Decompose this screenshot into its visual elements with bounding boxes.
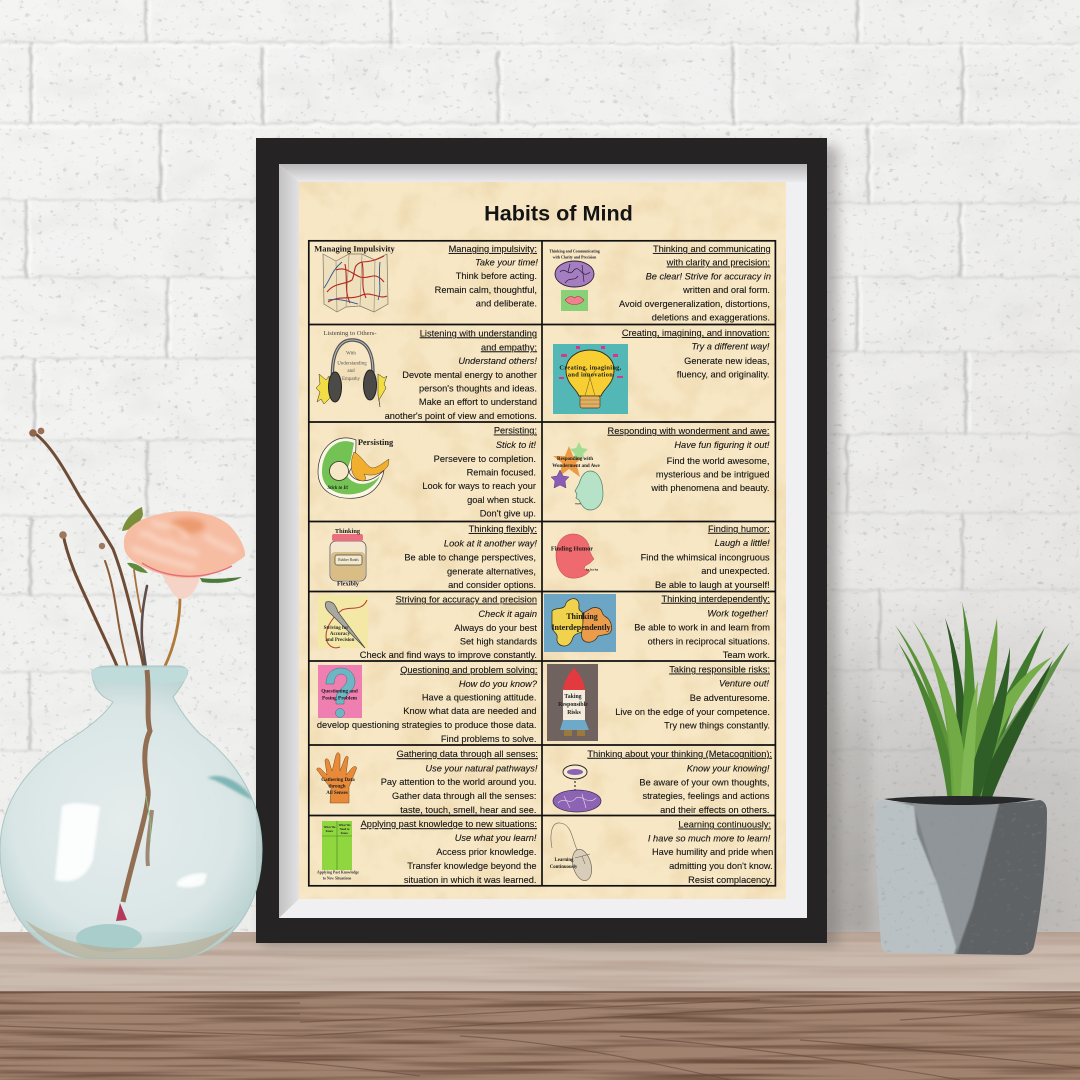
icon: puzzle pieces: Interdependently (551, 623, 611, 632)
icon: road map (314, 244, 396, 312)
icon: green chart: Know (326, 829, 334, 833)
text: accuracy and precision: Set high standards (460, 636, 537, 646)
rose (122, 507, 245, 599)
icon: jar (330, 528, 366, 588)
panel: learning continuously (550, 820, 773, 885)
icon: headphones: Listening to Others- (323, 330, 377, 337)
icon: green chart: Need to (340, 827, 350, 831)
icon: rocket: Risks (567, 710, 582, 716)
picture frame (256, 138, 827, 943)
text: questioning (317, 665, 538, 744)
text: thinking interdependently: Be able to work in and learn from (634, 622, 770, 632)
text: wonderment and awe: Have fun figuring it out! (674, 440, 770, 450)
picture frame shadow (262, 146, 838, 946)
branches (29, 428, 180, 668)
icon: question mark: Questioning and (321, 688, 358, 694)
icon: stars and head: Responding with (557, 457, 593, 462)
panel: taking responsible risks (547, 664, 770, 741)
icon: laughing head: ha ha ha (586, 568, 599, 572)
icon: stars and head: Wonderment and Awe (552, 464, 600, 469)
text: learning continuously: Learning continuously: (678, 820, 771, 830)
icon: rocket: Responsible (558, 702, 588, 708)
panel: creating and innovation (553, 328, 770, 414)
text: creating and innovation: Generate new ideas, (684, 356, 770, 366)
panel: persisting (318, 426, 537, 518)
wooden shelf (0, 932, 1080, 1080)
icon: tape dispenser: Stick to It! (327, 486, 349, 491)
text: persisting (422, 426, 537, 518)
text: applying past knowledge: Use what you learn! (455, 833, 537, 843)
icon: road map: Managing Impulsivity (314, 244, 396, 254)
text: thinking flexibly: Be able to change perspectives, (404, 553, 536, 563)
text: creating and innovation: Creating, imagining, and innovation: (622, 328, 770, 338)
text: listening (385, 328, 537, 421)
text: thinking flexibly: and consider options. (448, 580, 536, 590)
icon: light bulb: and innovation (568, 372, 613, 378)
text: applying past knowledge: Access prior knowledge. (436, 847, 536, 857)
text: managing impulsivity: Managing impulsivity: (449, 244, 537, 254)
icon: needle and thread: Striving for (324, 626, 349, 631)
icon: brain and lips: with Clarity and Precision (553, 256, 597, 260)
panel: wonderment and awe (551, 426, 770, 510)
text: metacognition: Be aware of your own thoughts, (639, 778, 770, 788)
text: thinking interdependently: Work together! (707, 608, 768, 618)
text: wonderment and awe: with phenomena and beauty. (650, 483, 770, 493)
panel: finding humor (551, 524, 770, 590)
text: taking responsible risks: Taking responsible risks: (669, 664, 770, 674)
vase body (0, 666, 262, 960)
text: persisting: Don't give up. (480, 508, 536, 518)
icon: stars and head (551, 442, 603, 510)
text: thinking interdependently (634, 594, 770, 660)
text: questioning: How do you know? (459, 679, 538, 689)
icon: light bulb (553, 344, 628, 414)
panel: metacognition (553, 749, 772, 815)
text: persisting: Stick to it! (496, 440, 536, 450)
concrete pot (876, 796, 1047, 955)
text: learning continuously: Have humility and pride when (652, 847, 773, 857)
icon: tape dispenser: Persisting (358, 438, 394, 447)
text: persisting: Persevere to completion. (434, 454, 536, 464)
text: accuracy and precision (360, 594, 537, 660)
icon: puzzle pieces: Thinking (566, 612, 598, 621)
vase with branches and rose (0, 428, 262, 960)
icon: headphones: and (347, 369, 355, 374)
text: applying past knowledge: Applying past knowledge to new situations: (361, 819, 537, 829)
panel: thinking interdependently (544, 594, 770, 660)
text: wonderment and awe: mysterious and be intrigued (656, 470, 770, 480)
icon: green chart: Know (341, 831, 349, 835)
text: gathering data: taste, touch, smell, hear and see. (400, 805, 536, 815)
text: listening: another's point of view and emotions. (385, 411, 537, 421)
text: thinking and communicating: deletions and exaggerations. (652, 312, 770, 322)
icon: computer mouse: Continuously (550, 865, 578, 870)
text: finding humor: Find the whimsical incongruous (641, 552, 770, 562)
text: metacognition: strategies, feelings and actions (642, 791, 770, 801)
icon: thought bubble and brain (553, 765, 601, 812)
parchment poster (299, 182, 786, 899)
icon: needle and thread: Accuracy (330, 632, 351, 637)
text: metacognition: Know your knowing! (687, 764, 770, 774)
text: taking responsible risks: Venture out! (719, 678, 769, 688)
text: learning continuously: admitting you don't know. (669, 861, 773, 871)
icon: hand (317, 753, 357, 803)
panel: questioning (317, 665, 538, 744)
text: gathering data: Pay attention to the world around you. (381, 777, 536, 787)
icon: laughing head: Finding Humor (551, 546, 593, 552)
text: finding humor: Finding humor: (708, 524, 770, 534)
text: managing impulsivity: Think before acting. (456, 271, 537, 281)
text: listening: and empathy: (481, 342, 537, 352)
text: gathering data: Use your natural pathways! (425, 764, 538, 774)
text: thinking flexibly (404, 524, 537, 590)
text: gathering data: Gathering data through all senses: (397, 749, 538, 759)
text: persisting: Look for ways to reach your (422, 481, 536, 491)
icon: laughing head (551, 534, 599, 578)
text: taking responsible risks: Live on the edge of your competence. (615, 707, 770, 717)
text: questioning: Find problems to solve. (441, 734, 536, 744)
text: gathering data (381, 749, 538, 815)
text: metacognition: and their effects on others. (660, 805, 770, 815)
potted plant (870, 602, 1070, 960)
text: thinking interdependently: others in reciprocal situations. (648, 636, 770, 646)
icon: rocket (547, 664, 598, 741)
icon: needle and thread: and Precision (326, 638, 355, 643)
text: finding humor: and unexpected. (701, 566, 770, 576)
icon: light bulb: Creating, imagining, (559, 364, 622, 372)
text: metacognition: Thinking about your thinking (Metacognition): (587, 749, 772, 759)
text: thinking interdependently: Thinking interdependently: (661, 594, 770, 604)
icon: hand: through (328, 784, 346, 790)
text: thinking flexibly: Look at it another way! (444, 539, 537, 549)
icon: green chart: to New Situations (323, 876, 352, 880)
icon: computer mouse: Learning (555, 858, 574, 863)
text: learning continuously: I have so much more to learn! (648, 834, 771, 844)
text: accuracy and precision: Check it again (478, 609, 537, 619)
icon: brain and lips (549, 250, 600, 311)
text: creating and innovation: fluency, and originality. (677, 370, 770, 380)
icon: headphones: Empathy (342, 377, 361, 382)
icon: hand: All Senses (326, 791, 348, 796)
text: thinking and communicating: Avoid overgeneralization, distortions, (619, 299, 770, 309)
icon: green chart (317, 821, 359, 880)
icon: brain and lips: Thinking and Communicating (549, 250, 600, 254)
text: listening: person's thoughts and ideas. (419, 384, 537, 394)
panel: applying past knowledge (317, 819, 537, 885)
icon: puzzle pieces (544, 594, 616, 652)
panel: gathering data (317, 749, 538, 815)
icon: headphones: Understanding (337, 362, 367, 366)
icon: rocket: Taking (564, 694, 582, 700)
text: thinking flexibly: generate alternatives, (447, 566, 536, 576)
text: thinking and communicating: written and oral form. (682, 285, 770, 295)
text: taking responsible risks: Try new things constantly. (664, 720, 770, 730)
icon: hand: Gathering Data (321, 778, 355, 783)
icon: needle and thread (318, 595, 368, 648)
text: learning continuously: Resist complacency. (688, 875, 772, 885)
icon: tape dispenser (318, 438, 394, 498)
icon: jar: Rubber Bands (338, 558, 359, 562)
text: applying past knowledge: situation in which it was learned. (404, 875, 536, 885)
text: thinking interdependently: Team work. (723, 650, 770, 660)
panel: thinking and communicating (549, 244, 771, 322)
white mat (279, 164, 807, 918)
panel: accuracy and precision (318, 594, 537, 660)
text: questioning: Know what data are needed and (403, 706, 536, 716)
text: taking responsible risks (615, 664, 770, 730)
text: thinking and communicating: with clarity and precision: (666, 258, 770, 268)
text: wonderment and awe (608, 426, 770, 493)
icon: question mark (318, 665, 362, 718)
table grid (308, 240, 776, 886)
text: listening: Devote mental energy to another (402, 370, 537, 380)
text: questioning: Have a questioning attitude. (422, 692, 536, 702)
text: thinking flexibly: Thinking flexibly: (469, 524, 537, 534)
icon: jar: Thinking (335, 528, 361, 535)
title: Habits of Mind (484, 200, 633, 226)
text: listening: Understand others! (458, 356, 537, 366)
text: persisting: Persisting: (494, 426, 537, 436)
text: listening: Make an effort to understand (419, 397, 537, 407)
text: managing impulsivity: and deliberate. (476, 298, 537, 308)
text: accuracy and precision: Check and find ways to improve constantly. (360, 650, 537, 660)
text: applying past knowledge: Transfer knowledge beyond the (407, 861, 536, 871)
text: applying past knowledge (361, 819, 537, 885)
icon: green chart: What We (323, 825, 336, 829)
text: thinking and communicating (619, 244, 771, 322)
panel: managing impulsivity (314, 244, 538, 312)
icon: stars and head: wow (575, 502, 582, 506)
leaves (895, 602, 1070, 803)
text: questioning: Questioning and problem solving: (400, 665, 538, 675)
icon: headphones: With (346, 352, 356, 356)
text: thinking and communicating: Thinking and communicating (653, 244, 771, 254)
text: metacognition (587, 749, 772, 815)
icon: green chart: What We (338, 823, 351, 827)
text: accuracy and precision: Striving for accuracy and precision (396, 594, 537, 604)
text: finding humor (641, 524, 770, 590)
text: creating and innovation (622, 328, 770, 380)
text: managing impulsivity: Take your time! (475, 258, 538, 268)
icon: question mark: Posing Problem (322, 696, 358, 702)
text: gathering data: Gather data through all the senses: (392, 791, 536, 801)
text: taking responsible risks: Be adventuresome. (690, 693, 770, 703)
icon: computer mouse (550, 823, 595, 883)
text: learning continuously (648, 820, 773, 885)
icon: headphones (316, 330, 387, 407)
text: wonderment and awe: Find the world awesome, (667, 456, 770, 466)
panel: thinking flexibly (330, 524, 537, 590)
text: persisting: Remain focused. (467, 468, 536, 478)
text: persisting: goal when stuck. (467, 495, 536, 505)
text: thinking and communicating: Be clear! Strive for accuracy in (646, 272, 771, 282)
icon: green chart: Applying Past Knowledge (317, 870, 359, 874)
text: managing impulsivity (435, 244, 538, 308)
icon: jar: Flexibly (337, 580, 360, 588)
text: wonderment and awe: Responding with wonderment and awe: (608, 426, 770, 436)
text: finding humor: Be able to laugh at yourself! (655, 580, 770, 590)
text: questioning: develop questioning strategies to produce those data. (317, 720, 536, 730)
text: managing impulsivity: Remain calm, thoughtful, (435, 285, 537, 295)
text: listening: Listening with understanding (420, 328, 537, 338)
text: accuracy and precision: Always do your best (454, 623, 537, 633)
text: creating and innovation: Try a different way! (692, 341, 770, 351)
panel: listening (316, 328, 537, 421)
text: finding humor: Laugh a little! (715, 538, 770, 548)
